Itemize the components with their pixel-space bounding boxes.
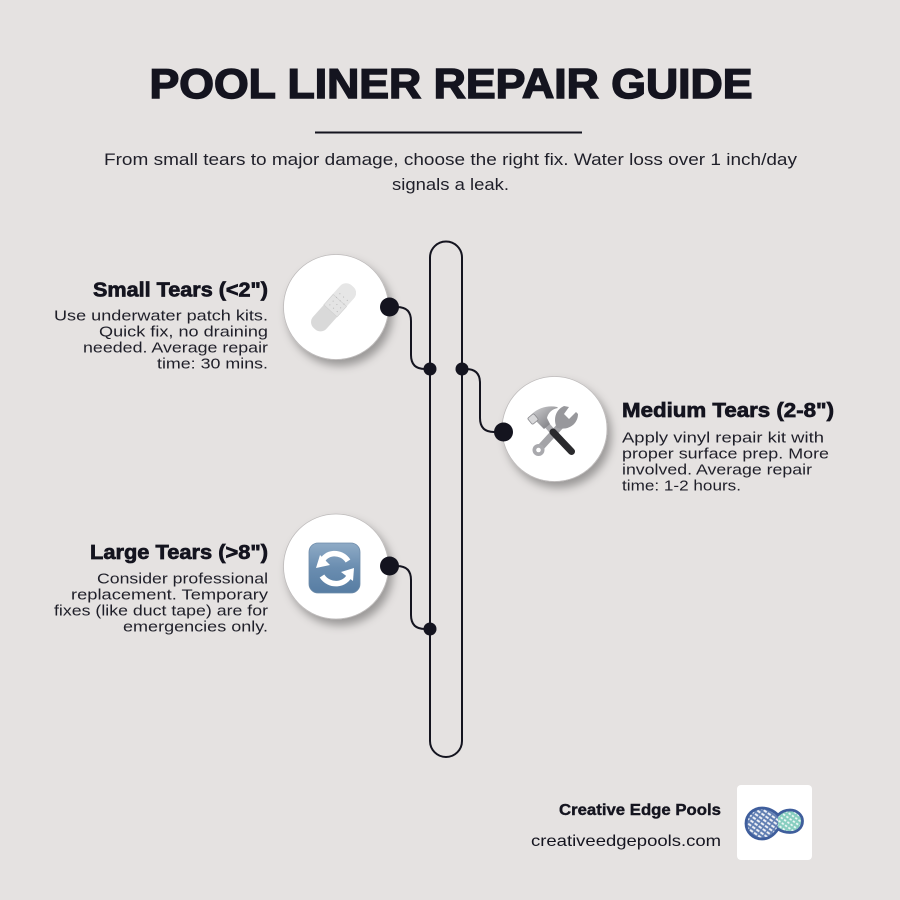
subtitle: signals a leak. [392, 175, 509, 194]
footer: brand [531, 785, 812, 860]
icon: replace arrows [284, 514, 399, 619]
text block: medium tears: proper surface prep. More [622, 446, 829, 462]
text block: small tears: Quick fix, no draining [99, 324, 268, 340]
heading: small tears: Small Tears (<2") [93, 280, 268, 302]
text block: large tears [54, 570, 269, 636]
text block: small tears: needed. Average repair [83, 340, 268, 356]
title: POOL LINER REPAIR GUIDE [150, 60, 752, 107]
connector node [380, 298, 399, 316]
text block: large tears: emergencies only. [123, 618, 268, 636]
text block: small tears: time: 30 mins. [157, 356, 268, 372]
text block: medium tears: time: 1-2 hours. [622, 478, 741, 494]
website: creativeedgepools.com [531, 833, 721, 850]
panel: large tears [54, 514, 399, 636]
text block: large tears: Consider professional [97, 570, 268, 588]
text block: small tears [54, 308, 268, 372]
timeline: central rounded track [430, 242, 462, 757]
panel: small tears [54, 254, 399, 372]
hammer handle [545, 423, 553, 432]
wrench [541, 424, 562, 447]
connector node [380, 556, 399, 576]
logo [737, 785, 812, 860]
connector node [494, 422, 513, 442]
heading: large tears: Large Tears (>8") [90, 542, 268, 564]
text block: medium tears: involved. Average repair [622, 462, 812, 478]
panel: medium tears [494, 376, 834, 494]
icon: hammer and wrench [494, 376, 607, 482]
connector: small tears [390, 307, 436, 376]
text block: medium tears: Apply vinyl repair kit with [622, 430, 824, 446]
text block: large tears: fixes (like duct tape) are for [54, 602, 268, 620]
connector: medium tears [456, 362, 503, 432]
subtitle: From small tears to major damage, choose the right fix. Water loss over 1 inch/day [104, 150, 798, 169]
brand name: Creative Edge Pools [559, 802, 721, 819]
text block: medium tears [622, 430, 829, 494]
connector: large tears [390, 566, 436, 636]
hammer head [532, 406, 558, 429]
heading: medium tears: Medium Tears (2-8") [622, 400, 834, 422]
icon: bandage [284, 254, 399, 360]
text block: small tears: Use underwater patch kits. [54, 308, 268, 324]
subtitle [104, 150, 798, 194]
text block: large tears: replacement. Temporary [71, 586, 269, 604]
